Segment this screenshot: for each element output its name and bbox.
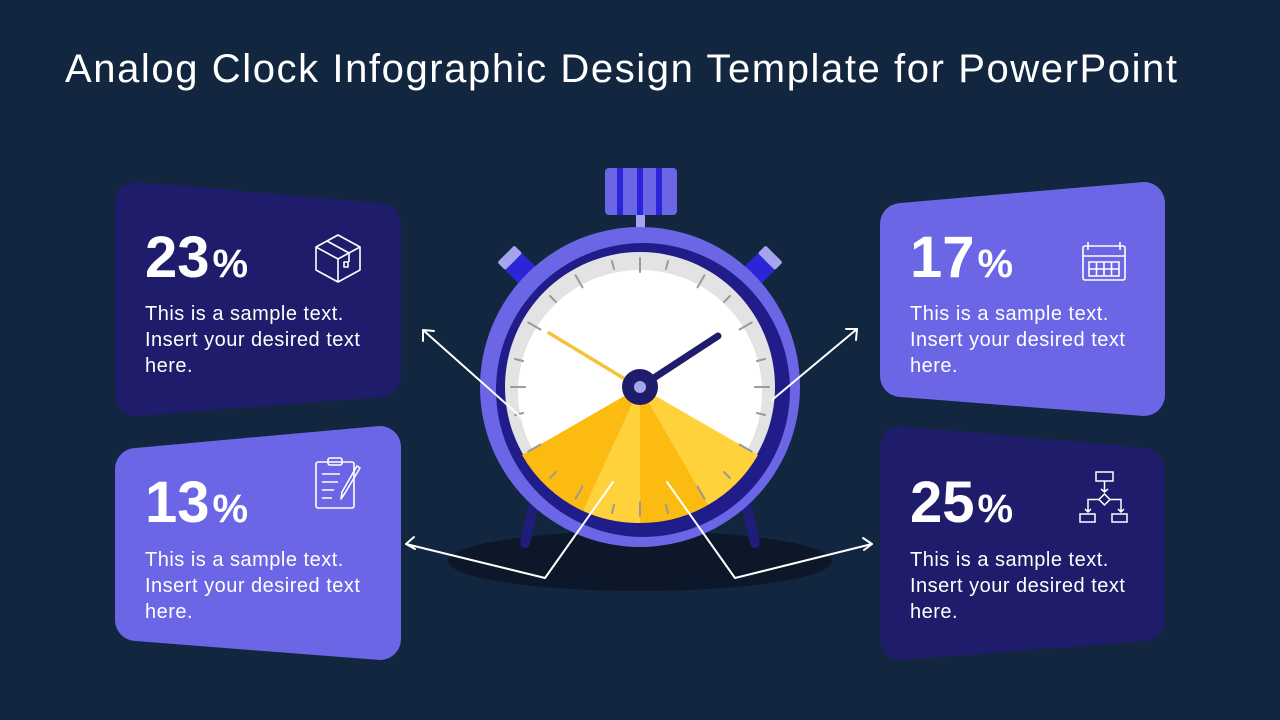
text block: Insert your desired text (910, 329, 1125, 351)
crown (636, 212, 645, 232)
number: 17%: 17% (910, 225, 1013, 290)
text block: This is a sample text. (145, 303, 344, 325)
panel: 17% (901, 203, 1144, 395)
arrow: to 13% (406, 482, 613, 578)
text block: Insert your desired text (145, 575, 360, 597)
shadow (448, 531, 832, 591)
legs (525, 500, 755, 543)
title: Analog Clock Infographic Design Template for PowerPoint (65, 47, 1177, 91)
text block: here. (910, 601, 958, 623)
icon: calendar (1083, 242, 1125, 280)
arrow: to 17% (772, 329, 857, 400)
icon: clipboard (316, 458, 360, 508)
text block: Insert your desired text (145, 329, 360, 351)
number: 13%: 13% (145, 470, 248, 535)
text block: here. (145, 601, 193, 623)
side buttons (497, 245, 537, 285)
arrow: to 23% (423, 330, 522, 418)
hands (640, 336, 718, 387)
panel: 23% (136, 203, 380, 395)
arrow: to 25% (667, 482, 872, 578)
number: 25%: 25% (910, 470, 1013, 535)
case (480, 227, 800, 547)
icon: flowchart (1080, 472, 1127, 522)
text block: here. (910, 355, 958, 377)
ticks (511, 258, 769, 516)
number: 23%: 23% (145, 225, 248, 290)
text block: This is a sample text. (910, 303, 1109, 325)
arrows (406, 329, 872, 578)
panel: 13% (136, 447, 380, 639)
clock (480, 168, 800, 547)
text block: This is a sample text. (910, 549, 1109, 571)
icon: box (316, 235, 360, 282)
panel: 25% (901, 447, 1144, 639)
text block: This is a sample text. (145, 549, 344, 571)
text block: here. (145, 355, 193, 377)
text block: Insert your desired text (910, 575, 1125, 597)
yellow sectors (522, 387, 758, 523)
